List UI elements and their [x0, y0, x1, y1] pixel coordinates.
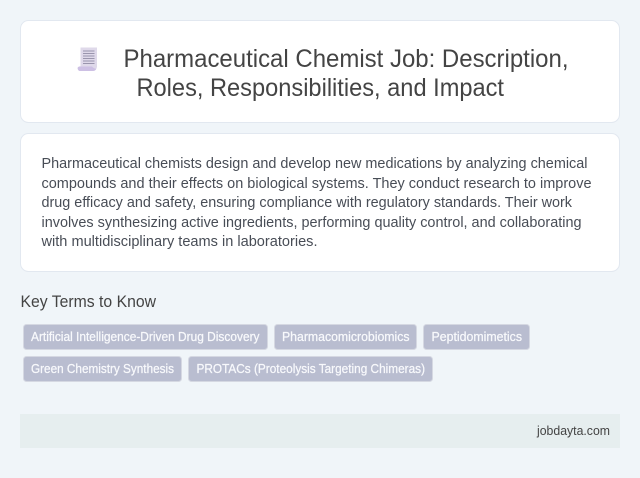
tag: peptidomimetics: Peptidomimetics: [432, 329, 522, 344]
tag: green chemistry: Green Chemistry Synthesis: [31, 361, 174, 376]
tags: key terms: [24, 324, 530, 382]
footer bar: [20, 414, 620, 448]
tag: peptidomimetics: [424, 324, 530, 350]
icon: document scroll: [78, 48, 97, 71]
tag: artificial intelligence: Artificial Intelligence-Driven Drug Discovery: [31, 329, 260, 344]
text block: description: with multidisciplinary teams in laboratories.: [41, 233, 318, 250]
tag: pharmacomicrobiomics: Pharmacomicrobiomics: [282, 329, 410, 344]
tag: protacs: [188, 356, 432, 382]
text block: description: involves synthesizing active ingredients, performing quality control, and collaborating: [42, 214, 582, 231]
tag: artificial intelligence: [24, 324, 268, 350]
tag: pharmacomicrobiomics: [274, 324, 416, 350]
text block: description: Pharmaceutical chemists design and develop new medications by analyzing chemical: [42, 155, 588, 172]
panel: description: [20, 134, 620, 272]
title: Pharmaceutical Chemist Job: Description,: [124, 45, 568, 73]
heading: key terms: Key Terms to Know: [20, 293, 156, 311]
text block: description: compounds and their effects on biological systems. They conduct research to improve: [42, 175, 592, 192]
text block: description: drug efficacy and safety, ensuring compliance with regulatory standards. Their work: [42, 194, 572, 211]
footer: site name: jobdayta.com: [536, 424, 610, 438]
panel: title card: [20, 20, 620, 122]
tag: protacs: PROTACs (Proteolysis Targeting Chimeras): [196, 361, 425, 376]
text block: description: [41, 155, 592, 250]
title: [124, 45, 568, 102]
title: Roles, Responsibilities, and Impact: [136, 74, 504, 102]
tag: green chemistry: [24, 356, 182, 382]
